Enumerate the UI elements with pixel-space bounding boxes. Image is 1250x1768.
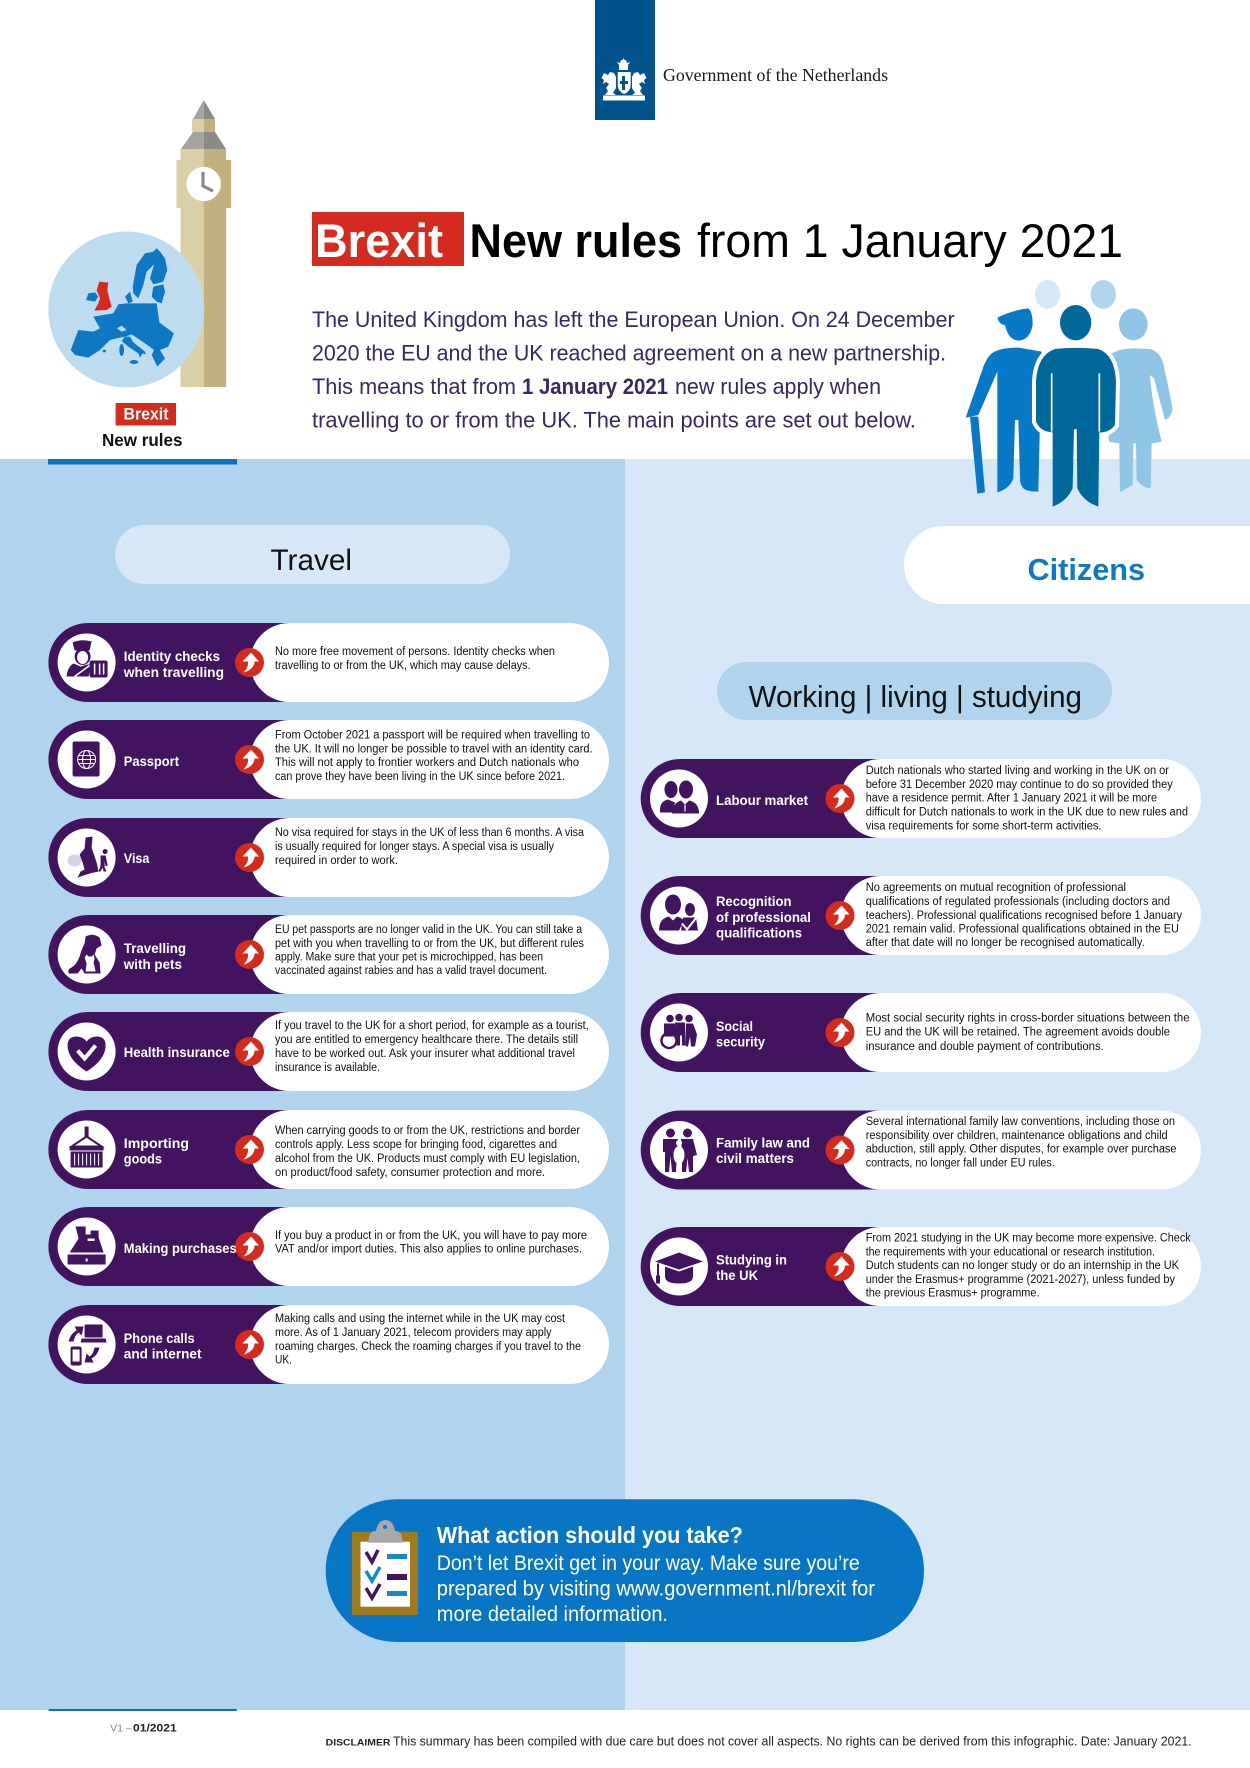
Sweden and Finland (133, 248, 167, 298)
arrow badge (235, 1037, 264, 1066)
icon: two business people (650, 770, 708, 828)
arrow badge (826, 1136, 854, 1164)
row: Travelling with pets (48, 915, 609, 994)
description (866, 1233, 1191, 1300)
row: Making purchases: Making purchases (124, 1240, 237, 1256)
heading: Citizens (904, 526, 1250, 604)
description (275, 1125, 580, 1179)
description: If you travel to the UK for a short period, for example as a tourist, (275, 1020, 589, 1032)
row: Recognition of professional qualifications: qualifications (716, 924, 802, 940)
arrow badge (235, 1232, 264, 1261)
arrow badge (826, 1252, 854, 1281)
description: required in order to work. (275, 855, 398, 867)
heading: Working living studying (717, 662, 1112, 720)
title (312, 212, 1123, 267)
description: before 31 December 2020 may continue to do so provided they (866, 779, 1173, 791)
description: Several international family law conventions, including those on (866, 1116, 1175, 1128)
row: Family law and civil matters (641, 1110, 1201, 1190)
row: Making purchases (48, 1207, 609, 1286)
description: you are entitled to emergency healthcare there. The details still (275, 1034, 578, 1046)
background: right column (625, 459, 1250, 1710)
description: controls apply. Less scope for bringing food, cigarettes and (275, 1139, 557, 1151)
disclaimer: DISCLAIMER (326, 1738, 391, 1748)
description (275, 1230, 587, 1256)
row: Phone calls and internet: and internet (124, 1346, 202, 1362)
description: contracts, no longer fall under EU rules. (866, 1158, 1055, 1170)
woman figure (1108, 308, 1172, 492)
arrow badge (235, 940, 264, 969)
icon: passport (58, 730, 116, 788)
row: Studying in the UK: the UK (716, 1267, 758, 1283)
row: Travelling with pets: Travelling (124, 940, 186, 956)
description (275, 1020, 589, 1074)
icon: border officer with suitcase (58, 634, 116, 692)
description: insurance is available. (275, 1062, 380, 1074)
description: apply. Make sure that your pet is microchipped, has been (275, 952, 543, 964)
description (866, 1116, 1176, 1170)
description: after that date will no longer be recognised automatically. (866, 937, 1145, 949)
intro text (312, 307, 955, 432)
Ireland (86, 292, 98, 302)
description: the requirements with your educational or research institution. (866, 1247, 1155, 1259)
description: more. As of 1 January 2021, telecom providers may apply (275, 1327, 552, 1339)
callout: What action should you take: What action should you take? (437, 1522, 743, 1548)
description: VAT and/or import duties. This also applies to online purchases. (275, 1244, 582, 1256)
description: have a residence permit. After 1 January 2021 it will be more (866, 793, 1157, 805)
Baltics (152, 284, 165, 303)
description: travelling to or from the UK, which may cause delays. (275, 660, 531, 672)
description: the previous Erasmus+ programme. (866, 1288, 1040, 1300)
description (275, 924, 584, 977)
callout: What action should you take (326, 1499, 924, 1642)
description: EU and the UK will be retained. The agreement avoids double (866, 1027, 1170, 1039)
description: No more free movement of persons. Identity checks when (275, 646, 555, 658)
arrow badge (826, 901, 854, 930)
icon: container on crane (58, 1120, 116, 1178)
callout: What action should you take: more detailed information. (437, 1603, 668, 1626)
row: Social security: security (716, 1034, 765, 1050)
row: Social security (641, 993, 1201, 1072)
row: Studying in the UK: Studying in (716, 1251, 787, 1267)
logo: Government of the Netherlands (595, 0, 888, 120)
icon: EU map in circle (48, 232, 204, 388)
description: qualifications of regulated professionals (including doctors and (866, 896, 1170, 908)
row: Importing goods (48, 1110, 609, 1189)
description: 2021 remain valid. Professional qualifications obtained in the EU (866, 924, 1179, 936)
description (866, 882, 1182, 949)
description (275, 1313, 581, 1366)
description: vaccinated against rabies and has a valid travel document. (275, 965, 547, 977)
Alps gap (117, 326, 127, 332)
description: If you buy a product in or from the UK, you will have to pay more (275, 1230, 587, 1242)
intro text: new rules apply when (675, 374, 881, 399)
description: have to be worked out. Ask your insurer what additional travel (275, 1048, 575, 1060)
description: No visa required for stays in the UK of less than 6 months. A visa (275, 827, 585, 839)
description: visa requirements for some short-term activities. (866, 820, 1102, 832)
description: abduction, still apply. Other disputes, for example over purchase (866, 1144, 1176, 1156)
small tag: Brexit New rules: Brexit (124, 406, 169, 424)
description: teachers). Professional qualifications recognised before 1 January (866, 910, 1182, 922)
icon: royal crest (602, 58, 646, 100)
Denmark (125, 292, 133, 303)
description: pet with you when travelling to or from the UK, but different rules (275, 938, 584, 950)
row: Identity checks when travelling: when travelling (123, 664, 224, 680)
description (866, 765, 1188, 832)
description: No agreements on mutual recognition of professional (866, 882, 1126, 894)
icon: family with wheelchair (650, 1004, 708, 1062)
intro text: 2020 the EU and the UK reached agreement on a new partnership. (312, 340, 946, 366)
title: New rules (470, 214, 682, 267)
arrow badge (235, 648, 264, 677)
callout: What action should you take: prepared by visiting www.government.nl/brexit for (437, 1578, 875, 1600)
description: responsibility over children, maintenance obligations and child (866, 1130, 1168, 1142)
footer line (49, 1709, 237, 1711)
row: Importing goods: goods (124, 1150, 162, 1166)
row: Family law and civil matters: civil matters (716, 1150, 794, 1166)
accent line under tag (48, 459, 237, 464)
intro text: The United Kingdom has left the European Union. On 24 December (312, 307, 955, 332)
row: Travelling with pets: with pets (123, 956, 182, 972)
row: Identity checks when travelling: Identity checks (124, 648, 220, 664)
background: left column (0, 459, 625, 1710)
small tag: Brexit New rules (102, 403, 183, 450)
description: Dutch nationals who started living and working in the UK on or (866, 765, 1169, 777)
row: Health insurance (48, 1012, 609, 1091)
arrow badge (235, 843, 264, 872)
description (275, 730, 593, 783)
row: Family law and civil matters: Family law and (716, 1135, 810, 1151)
description: When carrying goods to or from the UK, restrictions and border (275, 1125, 580, 1137)
row: Visa (48, 818, 609, 897)
icon: Big Ben tower (176, 100, 231, 387)
man with cane figure (966, 308, 1042, 494)
centre man outline (1036, 348, 1116, 432)
icon: mortarboard (650, 1238, 708, 1296)
continent (71, 303, 174, 367)
arrow badge (235, 1135, 264, 1164)
description: UK. (275, 1354, 292, 1366)
arrow badge (235, 745, 264, 774)
description (275, 646, 555, 672)
icon: professional with check (650, 886, 708, 944)
row: Labour market (641, 759, 1201, 838)
description: roaming charges. Check the roaming charges if you travel to the (275, 1341, 581, 1353)
row: Recognition of professional qualifications: of professional (716, 909, 811, 925)
intro text: travelling to or from the UK. The main points are set out below. (312, 408, 916, 432)
title: from 1 January 2021 (697, 214, 1123, 267)
row: Health insurance: Health insurance (124, 1044, 230, 1060)
United Kingdom (94, 282, 112, 311)
disclaimer: This summary has been compiled with due care but does not cover all aspects. No rights can be derived from this infographic. Date: January 2021. (393, 1735, 1192, 1749)
heading: Citizens: Citizens (1028, 552, 1145, 587)
row: Identity checks when travelling (48, 623, 609, 702)
arrow badge (826, 784, 854, 813)
centre man figure (1036, 305, 1116, 507)
intro text: This means that from (312, 374, 516, 399)
icon: parents and child (650, 1121, 708, 1179)
description: alcohol from the UK. Products must comply with EU legislation, (275, 1153, 580, 1165)
row: Studying in the UK (641, 1227, 1201, 1306)
description: difficult for Dutch nationals to work in the UK due to new rules and (866, 807, 1188, 819)
description: Most social security rights in cross-border situations between the (866, 1013, 1190, 1025)
row: Recognition of professional qualifications (641, 876, 1201, 955)
description: From 2021 studying in the UK may become more expensive. Check (866, 1233, 1191, 1245)
row: Passport (48, 720, 609, 799)
description: This will not apply to frontier workers and Dutch nationals who (275, 757, 579, 769)
row: Importing goods: Importing (124, 1135, 189, 1151)
icon: heart with check (58, 1022, 116, 1080)
description: on product/food safety, consumer protection and more. (275, 1167, 545, 1179)
row: Visa: Visa (124, 850, 150, 866)
description: EU pet passports are no longer valid in the UK. You can still take a (275, 924, 583, 936)
description: insurance and double payment of contributions. (866, 1041, 1104, 1053)
heading: Travel (115, 525, 510, 584)
description: From October 2021 a passport will be required when travelling to (275, 730, 590, 742)
description: Dutch students can no longer study or do an internship in the UK (866, 1260, 1179, 1272)
icon: group of citizens (966, 280, 1172, 507)
Italy (122, 337, 146, 358)
heading: Working living studying: Working | living | studying (749, 679, 1082, 714)
description: the UK. It will no longer be possible to travel with an identity card. (275, 744, 593, 756)
footer version: 01/2021 (133, 1723, 177, 1735)
icon: dog and cat (58, 926, 116, 984)
row: Labour market: Labour market (716, 792, 808, 808)
footer version: V1 – (110, 1723, 132, 1735)
description (866, 1013, 1190, 1053)
arrow badge (826, 1018, 854, 1047)
row: Phone calls and internet (48, 1305, 609, 1384)
title: Brexit (315, 214, 443, 267)
small tag: Brexit New rules: New rules (102, 430, 183, 450)
icon: UK map with person (58, 828, 116, 886)
description (275, 827, 585, 867)
description: under the Erasmus+ programme (2021-2027), unless funded by (866, 1274, 1175, 1286)
icon: cash register (58, 1218, 116, 1276)
description: Making calls and using the internet while in the UK may cost (275, 1313, 566, 1325)
row: Phone calls and internet: Phone calls (124, 1330, 195, 1346)
logo wordmark: Government of the Netherlands (663, 65, 888, 85)
row: Social security: Social (716, 1018, 753, 1034)
row: Recognition of professional qualifications: Recognition (716, 893, 792, 909)
arrow badge (235, 1330, 264, 1359)
callout: What action should you take: Don’t let Brexit get in your way. Make sure you’re (437, 1552, 860, 1575)
footer version (110, 1723, 177, 1735)
description: is usually required for longer stays. A special visa is usually (275, 841, 554, 853)
intro text: 1 January 2021 (522, 374, 668, 399)
icon: phone and laptop with arrows (58, 1316, 116, 1374)
description: can prove they have been living in the UK since before 2021. (275, 771, 565, 783)
icon: clipboard checklist (352, 1520, 418, 1615)
heading: Travel: Travel (270, 544, 352, 577)
row: Passport: Passport (124, 753, 179, 769)
